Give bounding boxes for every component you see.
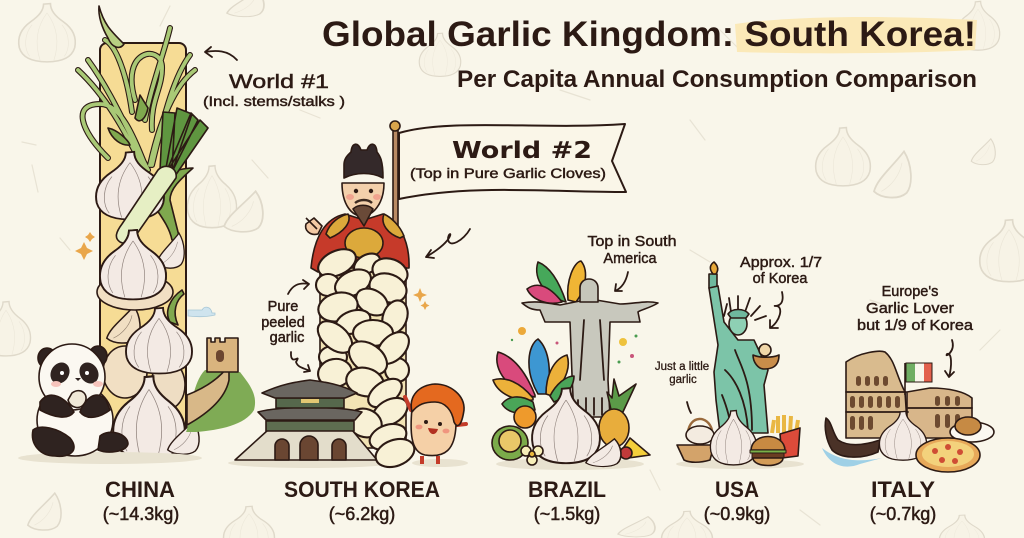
label: china (103, 477, 179, 524)
palace gate (228, 380, 392, 468)
garlic bulb (532, 388, 600, 463)
fries (772, 415, 800, 458)
fruit (492, 379, 650, 460)
beige bulb back (103, 346, 147, 398)
garlic bulb (126, 308, 192, 374)
china bar (100, 43, 186, 447)
label: italy: (~0.7kg) (870, 504, 936, 524)
note: pure peeled garlic (261, 280, 310, 372)
panel: usa (655, 255, 822, 469)
callout: world 1: World #1 (229, 72, 329, 93)
garlic bulb lower (113, 376, 185, 459)
christ statue (522, 279, 658, 417)
callout: europe's garlic lover: but 1/9 of Korea (857, 318, 974, 334)
sparkle (413, 288, 430, 310)
panel: china (78, 6, 208, 459)
callout: approx 1/7: Approx. 1/7 (740, 255, 822, 271)
flag of italy (905, 363, 932, 395)
callout: europe's garlic lover: Europe's (882, 284, 938, 300)
banner flag (399, 124, 626, 199)
garlic bulb upper (96, 152, 164, 219)
banner text: World #2 (452, 138, 592, 164)
label: south korea: (~6.2kg) (329, 504, 395, 524)
label: brazil: BRAZIL (528, 477, 606, 502)
title text: Global Garlic Kingdom: South Korea! (322, 15, 976, 54)
callout: world 1 (203, 47, 345, 109)
feathers behind statue (527, 261, 585, 303)
big peeled clove (372, 434, 418, 472)
callout: world 1: (Incl. stems/stalks ) (203, 93, 345, 109)
label: usa: (~0.9kg) (704, 504, 770, 524)
label: china: CHINA (105, 477, 175, 502)
garlic bulb (710, 411, 757, 465)
panel: south korea (228, 121, 626, 472)
callout: approx 1/7: of Korea (753, 271, 808, 287)
arrow to pile (426, 229, 470, 258)
callout: top in south america (588, 234, 676, 291)
icon: panda (18, 344, 202, 464)
burger (750, 436, 786, 466)
callout: top in south america: America (603, 251, 658, 267)
garlic stalks (78, 28, 195, 172)
peeled garlic cloves (312, 244, 415, 455)
scape bud (99, 6, 124, 47)
label: brazil (528, 477, 606, 524)
label: brazil: (~1.5kg) (534, 504, 600, 524)
banner text: (Top in Pure Garlic Cloves) (410, 166, 606, 181)
garlic clove (156, 233, 184, 268)
label: usa: USA (715, 477, 759, 502)
callout: top in south america: Top in South (588, 234, 676, 250)
kimchi character (405, 384, 468, 467)
callout: approx 1/7 (740, 255, 822, 328)
panel: brazil (492, 234, 676, 470)
pile column (320, 268, 406, 448)
basket (677, 419, 714, 462)
flower (521, 446, 543, 465)
callout: europe's garlic lover: Garlic Lover (866, 301, 954, 317)
beige clove (107, 306, 140, 343)
panel: italy (822, 284, 994, 472)
bowl (753, 355, 779, 369)
dark green leaves (108, 95, 193, 240)
clove beside (168, 421, 199, 454)
note: just a little garlic (655, 361, 709, 413)
garlic bulb (879, 411, 927, 460)
title (322, 15, 977, 54)
title highlight (735, 17, 977, 53)
scallion (116, 108, 208, 243)
note: just a little garlic: garlic (669, 374, 697, 386)
label: usa (704, 477, 770, 524)
garlic bulb (100, 230, 166, 299)
icon: great wall (186, 307, 255, 432)
label: south korea: SOUTH KOREA (284, 477, 440, 502)
gondola (822, 418, 882, 467)
note: just a little garlic: Just a little (655, 361, 709, 373)
pizza (916, 438, 980, 472)
feathers front (493, 339, 574, 413)
statue of liberty (709, 262, 768, 433)
banner text (410, 138, 606, 181)
confetti (511, 327, 638, 364)
label: china: (~14.3kg) (103, 504, 179, 524)
green leaf (168, 290, 184, 325)
garlic bulb (100, 230, 166, 299)
sparkle (75, 232, 95, 260)
callout: europe's garlic lover (857, 284, 974, 377)
label: italy: ITALY (871, 477, 935, 502)
note: pure peeled garlic: Pure (268, 299, 298, 315)
clove (586, 439, 621, 467)
colosseum (846, 351, 972, 438)
king (306, 144, 409, 272)
note: pure peeled garlic: garlic (270, 330, 304, 346)
note: pure peeled garlic: peeled (261, 315, 305, 331)
pasta plate (950, 417, 994, 442)
label: italy (870, 477, 936, 524)
flag pole (393, 130, 398, 240)
subtitle: Per Capita Annual Consumption Comparison (457, 66, 977, 93)
label: south korea (284, 477, 440, 524)
